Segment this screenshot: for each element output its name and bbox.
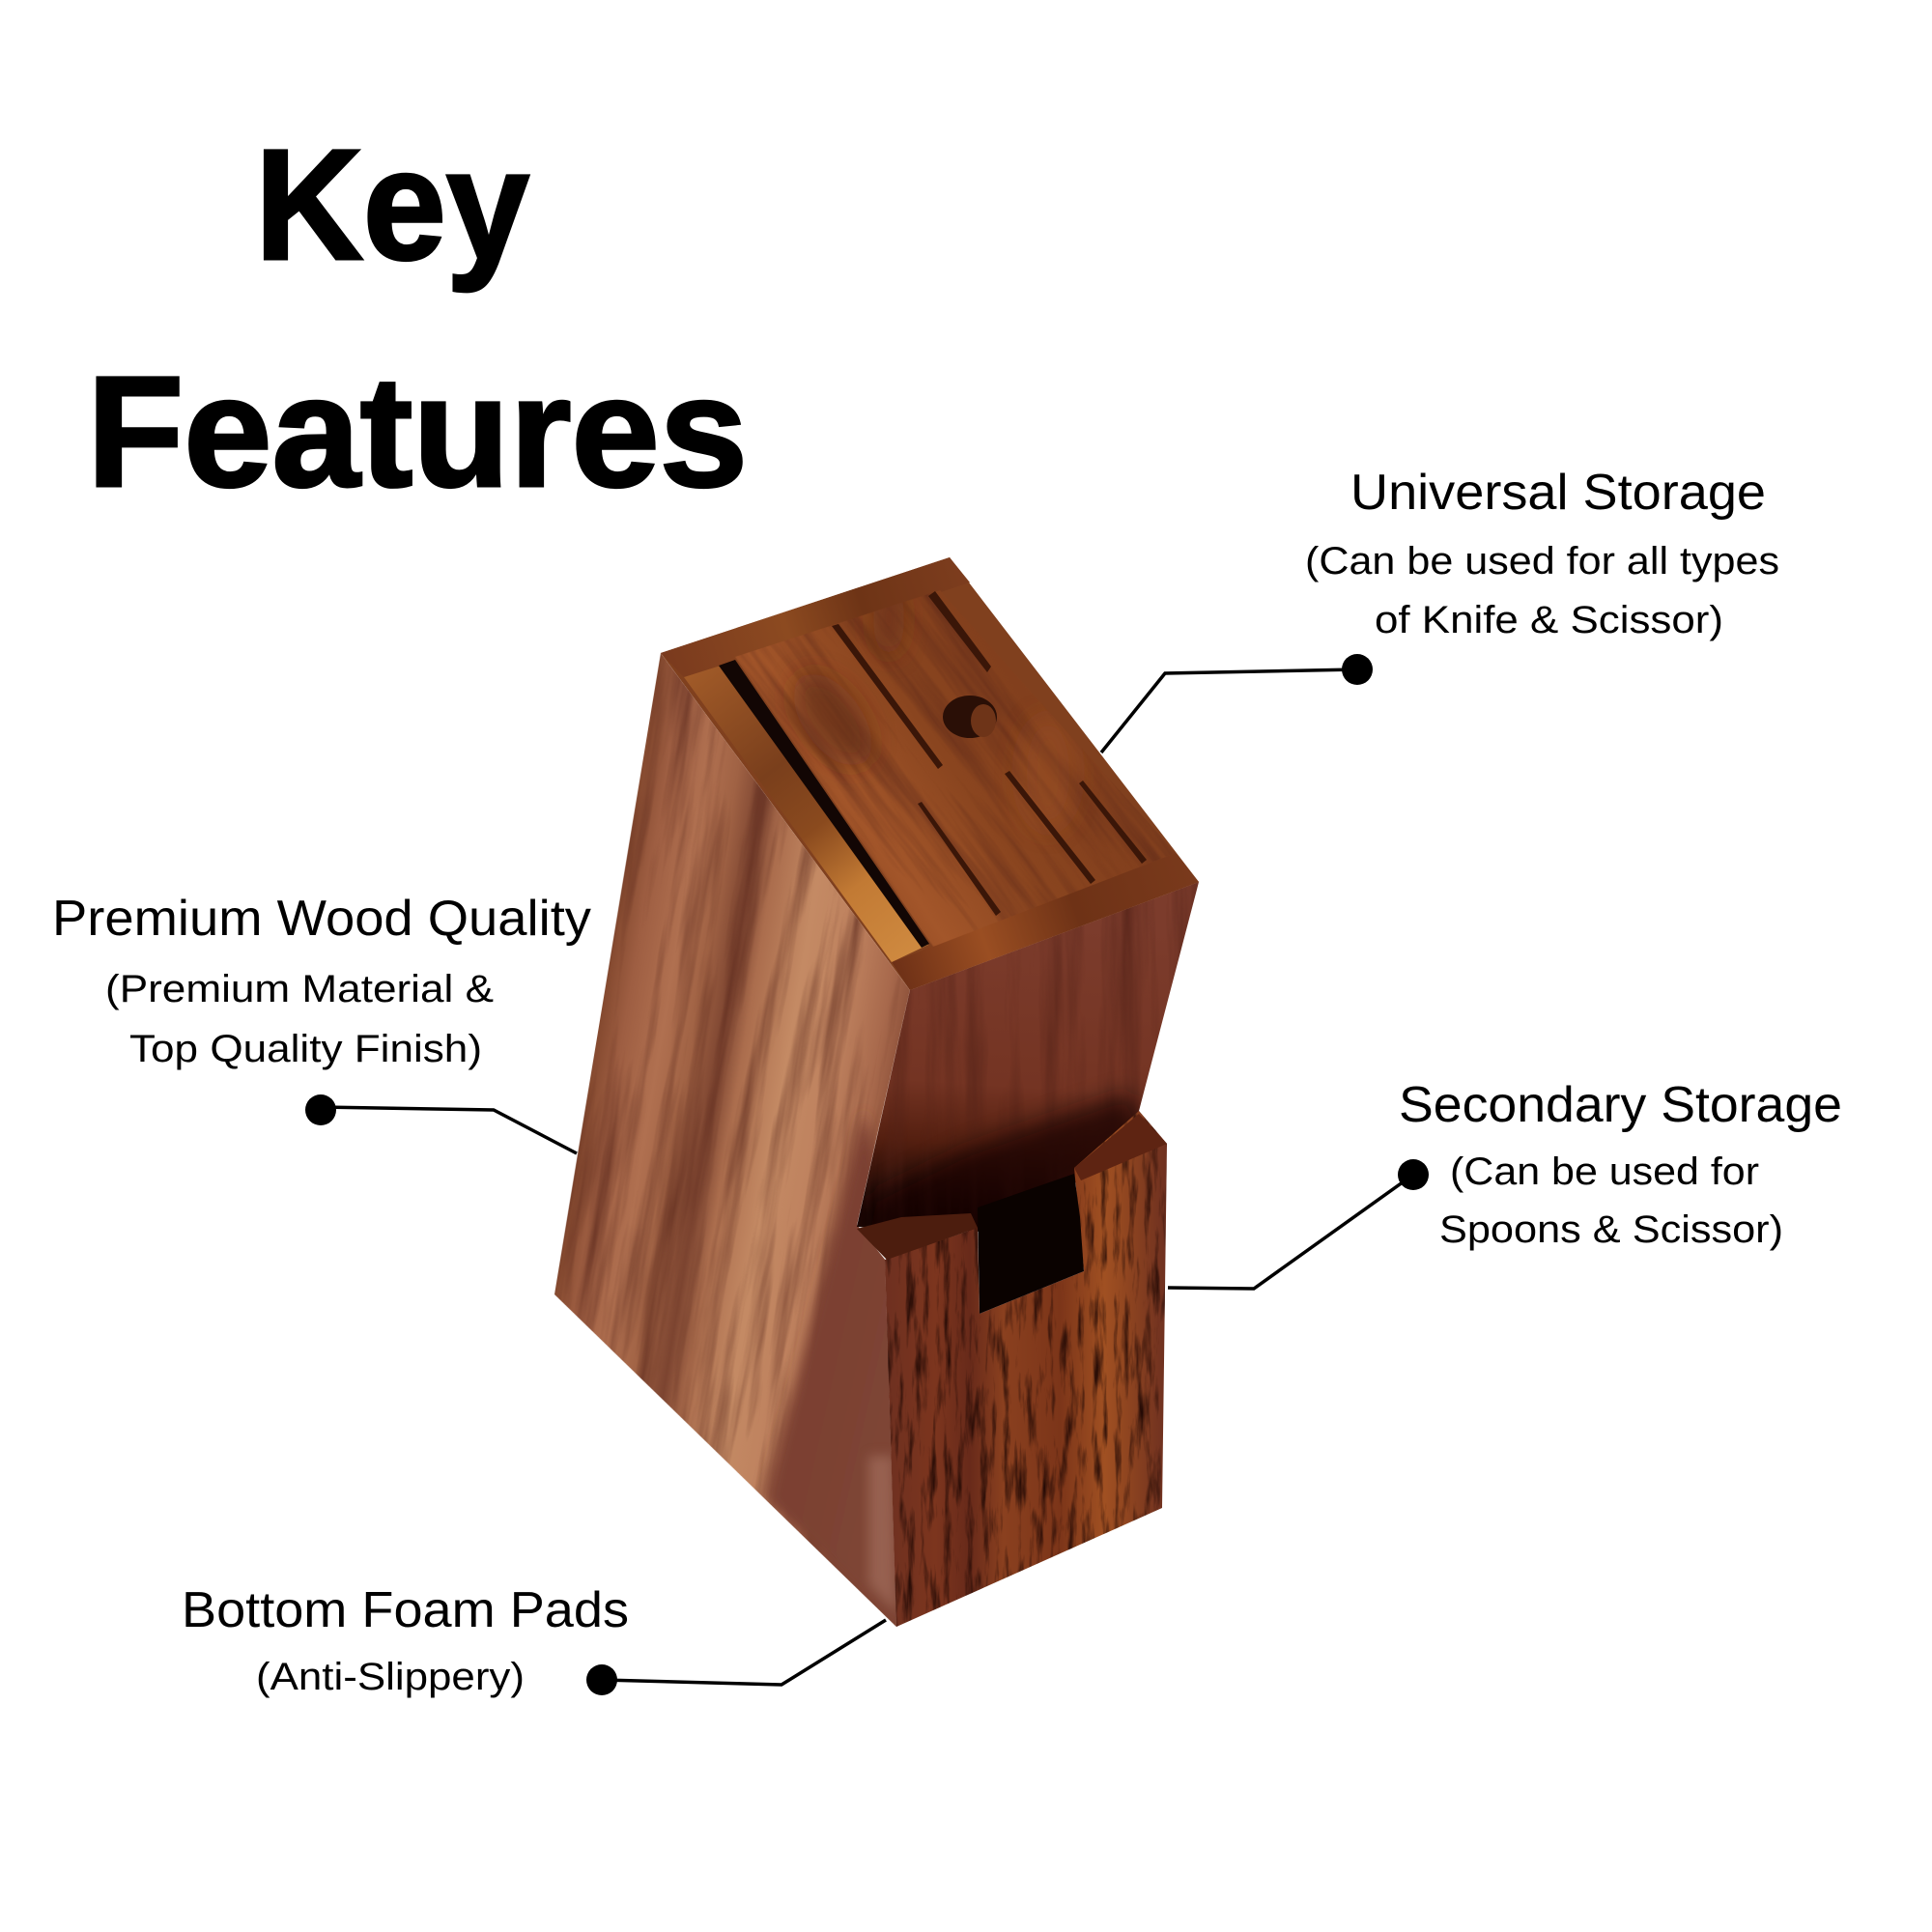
light strip on left of top	[684, 666, 928, 962]
front slot opening	[978, 1174, 1084, 1314]
product photo: wooden knife block	[554, 557, 1199, 1627]
round steel hole	[943, 696, 997, 738]
callout: Bottom Foam Pads	[182, 1582, 886, 1698]
callout: Universal Storage: Universal Storage	[1350, 465, 1766, 521]
left lip of lower front	[857, 1213, 978, 1260]
title: Key	[255, 116, 529, 293]
darker lower wedge of left face	[762, 1111, 908, 1642]
knife slots	[832, 591, 1147, 916]
callout: Secondary Storage: Secondary Storage	[1399, 1077, 1842, 1133]
callout: Universal Storage: (Can be used for all types	[1305, 540, 1779, 582]
callout: Premium Wood Quality: Top Quality Finish)	[129, 1028, 482, 1070]
right lip of lower front	[1074, 1114, 1167, 1180]
callout: Universal Storage: of Knife & Scissor)	[1375, 599, 1723, 641]
dark knots in panel	[785, 603, 1078, 821]
title: Features	[87, 343, 748, 520]
back rim	[661, 557, 970, 677]
long black slot	[719, 660, 929, 948]
callout: Secondary Storage: Spoons & Scissor)	[1439, 1208, 1783, 1251]
callout: Universal Storage	[1101, 465, 1779, 753]
callout: Secondary Storage: (Can be used for	[1450, 1151, 1759, 1193]
front rim	[892, 853, 1199, 990]
shadow above lower front	[860, 1092, 1150, 1246]
callout: Bottom Foam Pads: Bottom Foam Pads	[182, 1582, 629, 1638]
callout: Premium Wood Quality	[52, 891, 591, 1153]
title	[87, 116, 748, 520]
top face outer rim	[661, 557, 1199, 990]
left face of block	[396, 595, 1068, 1685]
top inner panel	[565, 380, 1346, 1157]
callout: Secondary Storage	[1168, 1077, 1842, 1289]
callout: Premium Wood Quality: Premium Wood Quality	[52, 891, 591, 947]
callout: Premium Wood Quality: (Premium Material &	[105, 968, 494, 1010]
lower front face	[885, 1111, 1167, 1627]
upper front face	[857, 882, 1199, 1232]
callout: Bottom Foam Pads: (Anti-Slippery)	[256, 1656, 525, 1698]
